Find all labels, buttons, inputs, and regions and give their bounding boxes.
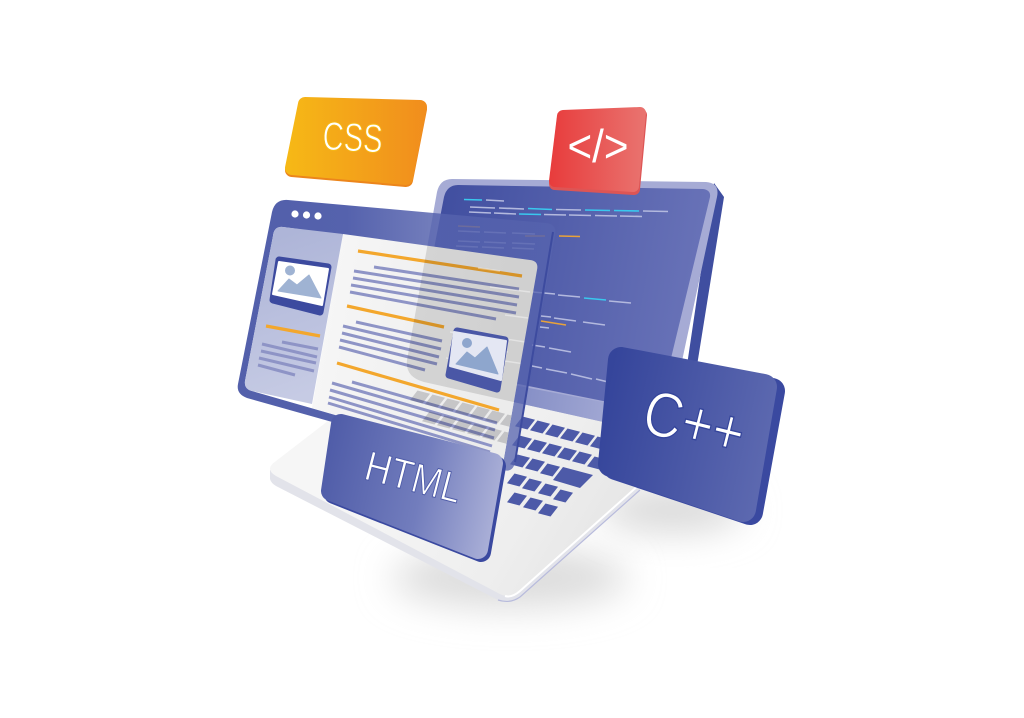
- shadow under C++ card: [600, 488, 744, 532]
- laptop base: [270, 350, 690, 602]
- screen bottom band: [410, 365, 670, 436]
- CSS badge: CSS: [322, 114, 384, 162]
- C++ badge: [611, 360, 772, 512]
- code lines: [456, 200, 668, 383]
- image card left: [273, 260, 328, 312]
- laptop screen: [407, 179, 724, 436]
- screen display: [414, 185, 710, 412]
- keyboard: [507, 416, 610, 516]
- HTML badge: HTML: [360, 442, 467, 512]
- faint code lines through page: [446, 268, 530, 367]
- code tag badge: [555, 113, 641, 189]
- CSS badge: [292, 104, 420, 180]
- window dots: [291, 210, 322, 220]
- window right edge: [515, 232, 553, 462]
- illustration: [238, 97, 785, 620]
- keyboard seen through page: [410, 390, 520, 444]
- C++ badge: C++: [636, 375, 753, 470]
- body text lines: [328, 267, 519, 452]
- sidebar: [245, 227, 343, 404]
- main page: [312, 234, 538, 460]
- image card right: [449, 331, 506, 389]
- code tag badge: </>: [568, 120, 628, 172]
- heading lines: [337, 251, 522, 410]
- screen seen through page: [406, 246, 538, 402]
- browser window: [238, 200, 554, 471]
- shadow under laptop: [392, 548, 628, 608]
- screen side edge: [686, 183, 724, 372]
- HTML badge: [331, 424, 496, 552]
- window frame: [238, 200, 555, 471]
- screen bezel: [407, 179, 718, 436]
- sidebar text lines: [258, 326, 320, 375]
